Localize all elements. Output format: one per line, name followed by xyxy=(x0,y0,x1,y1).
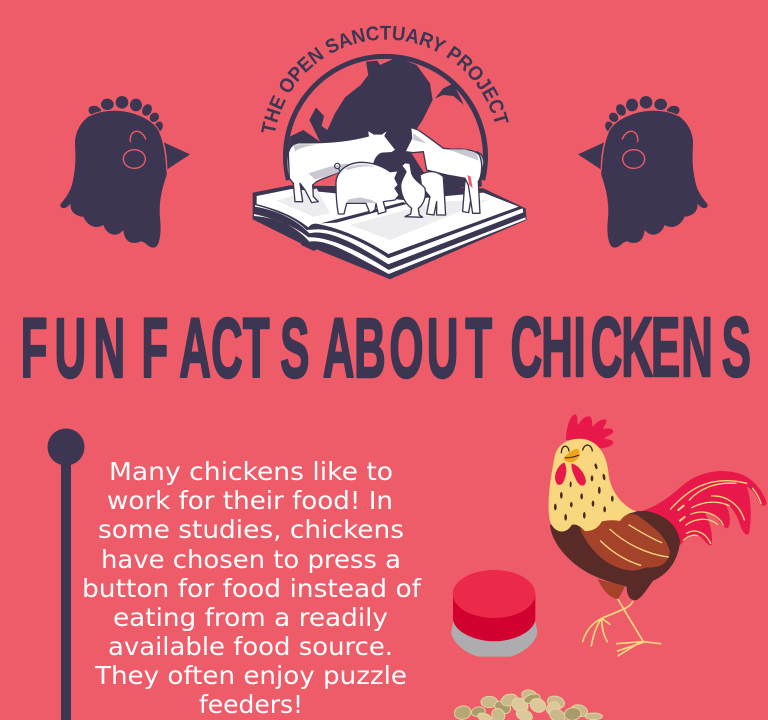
title word: About: ABOUT xyxy=(323,302,492,396)
fact text block: work for their food! In xyxy=(107,486,393,515)
cow xyxy=(287,129,396,203)
fact text block xyxy=(82,457,422,719)
hen and rooster xyxy=(401,163,446,217)
title word: Facts: FACTS xyxy=(141,302,309,396)
fact text block: eating from a readily xyxy=(113,603,388,632)
icon: left chicken xyxy=(60,96,190,248)
rooster wing xyxy=(580,514,670,571)
fact text block: have chosen to press a xyxy=(101,545,401,574)
title xyxy=(21,301,751,396)
fact text block: They often enjoy puzzle xyxy=(94,661,407,690)
fact text block: some studies, chickens xyxy=(98,515,404,544)
rooster comb xyxy=(566,414,613,448)
rooster neck and head xyxy=(549,439,637,532)
title word: Chickens: CHICKENS xyxy=(511,301,751,395)
logo arc text: THE OPEN SANCTUARY PROJECT xyxy=(261,26,509,132)
globe xyxy=(285,56,485,193)
horse xyxy=(405,127,484,213)
fact text block: Many chickens like to xyxy=(109,457,393,486)
rooster speckles xyxy=(554,463,614,521)
timeline marker xyxy=(48,428,84,720)
logo: The Open Sanctuary Project xyxy=(252,26,527,280)
rooster legs xyxy=(583,598,661,656)
fact text block: button for food instead of xyxy=(82,574,422,603)
rooster thigh xyxy=(598,579,625,599)
pig xyxy=(335,162,399,214)
rooster face xyxy=(555,445,592,486)
title word: Fun: FUN xyxy=(21,302,125,396)
book xyxy=(253,185,527,279)
fact text block: available food source. xyxy=(108,632,393,661)
icon: seed pile xyxy=(453,689,602,720)
icon: rooster and button xyxy=(451,414,767,657)
fact text block: feeders! xyxy=(199,690,303,719)
rooster body xyxy=(550,511,680,600)
icon: right chicken xyxy=(578,96,708,248)
icon: red button xyxy=(451,570,537,657)
rooster tail xyxy=(640,471,767,548)
